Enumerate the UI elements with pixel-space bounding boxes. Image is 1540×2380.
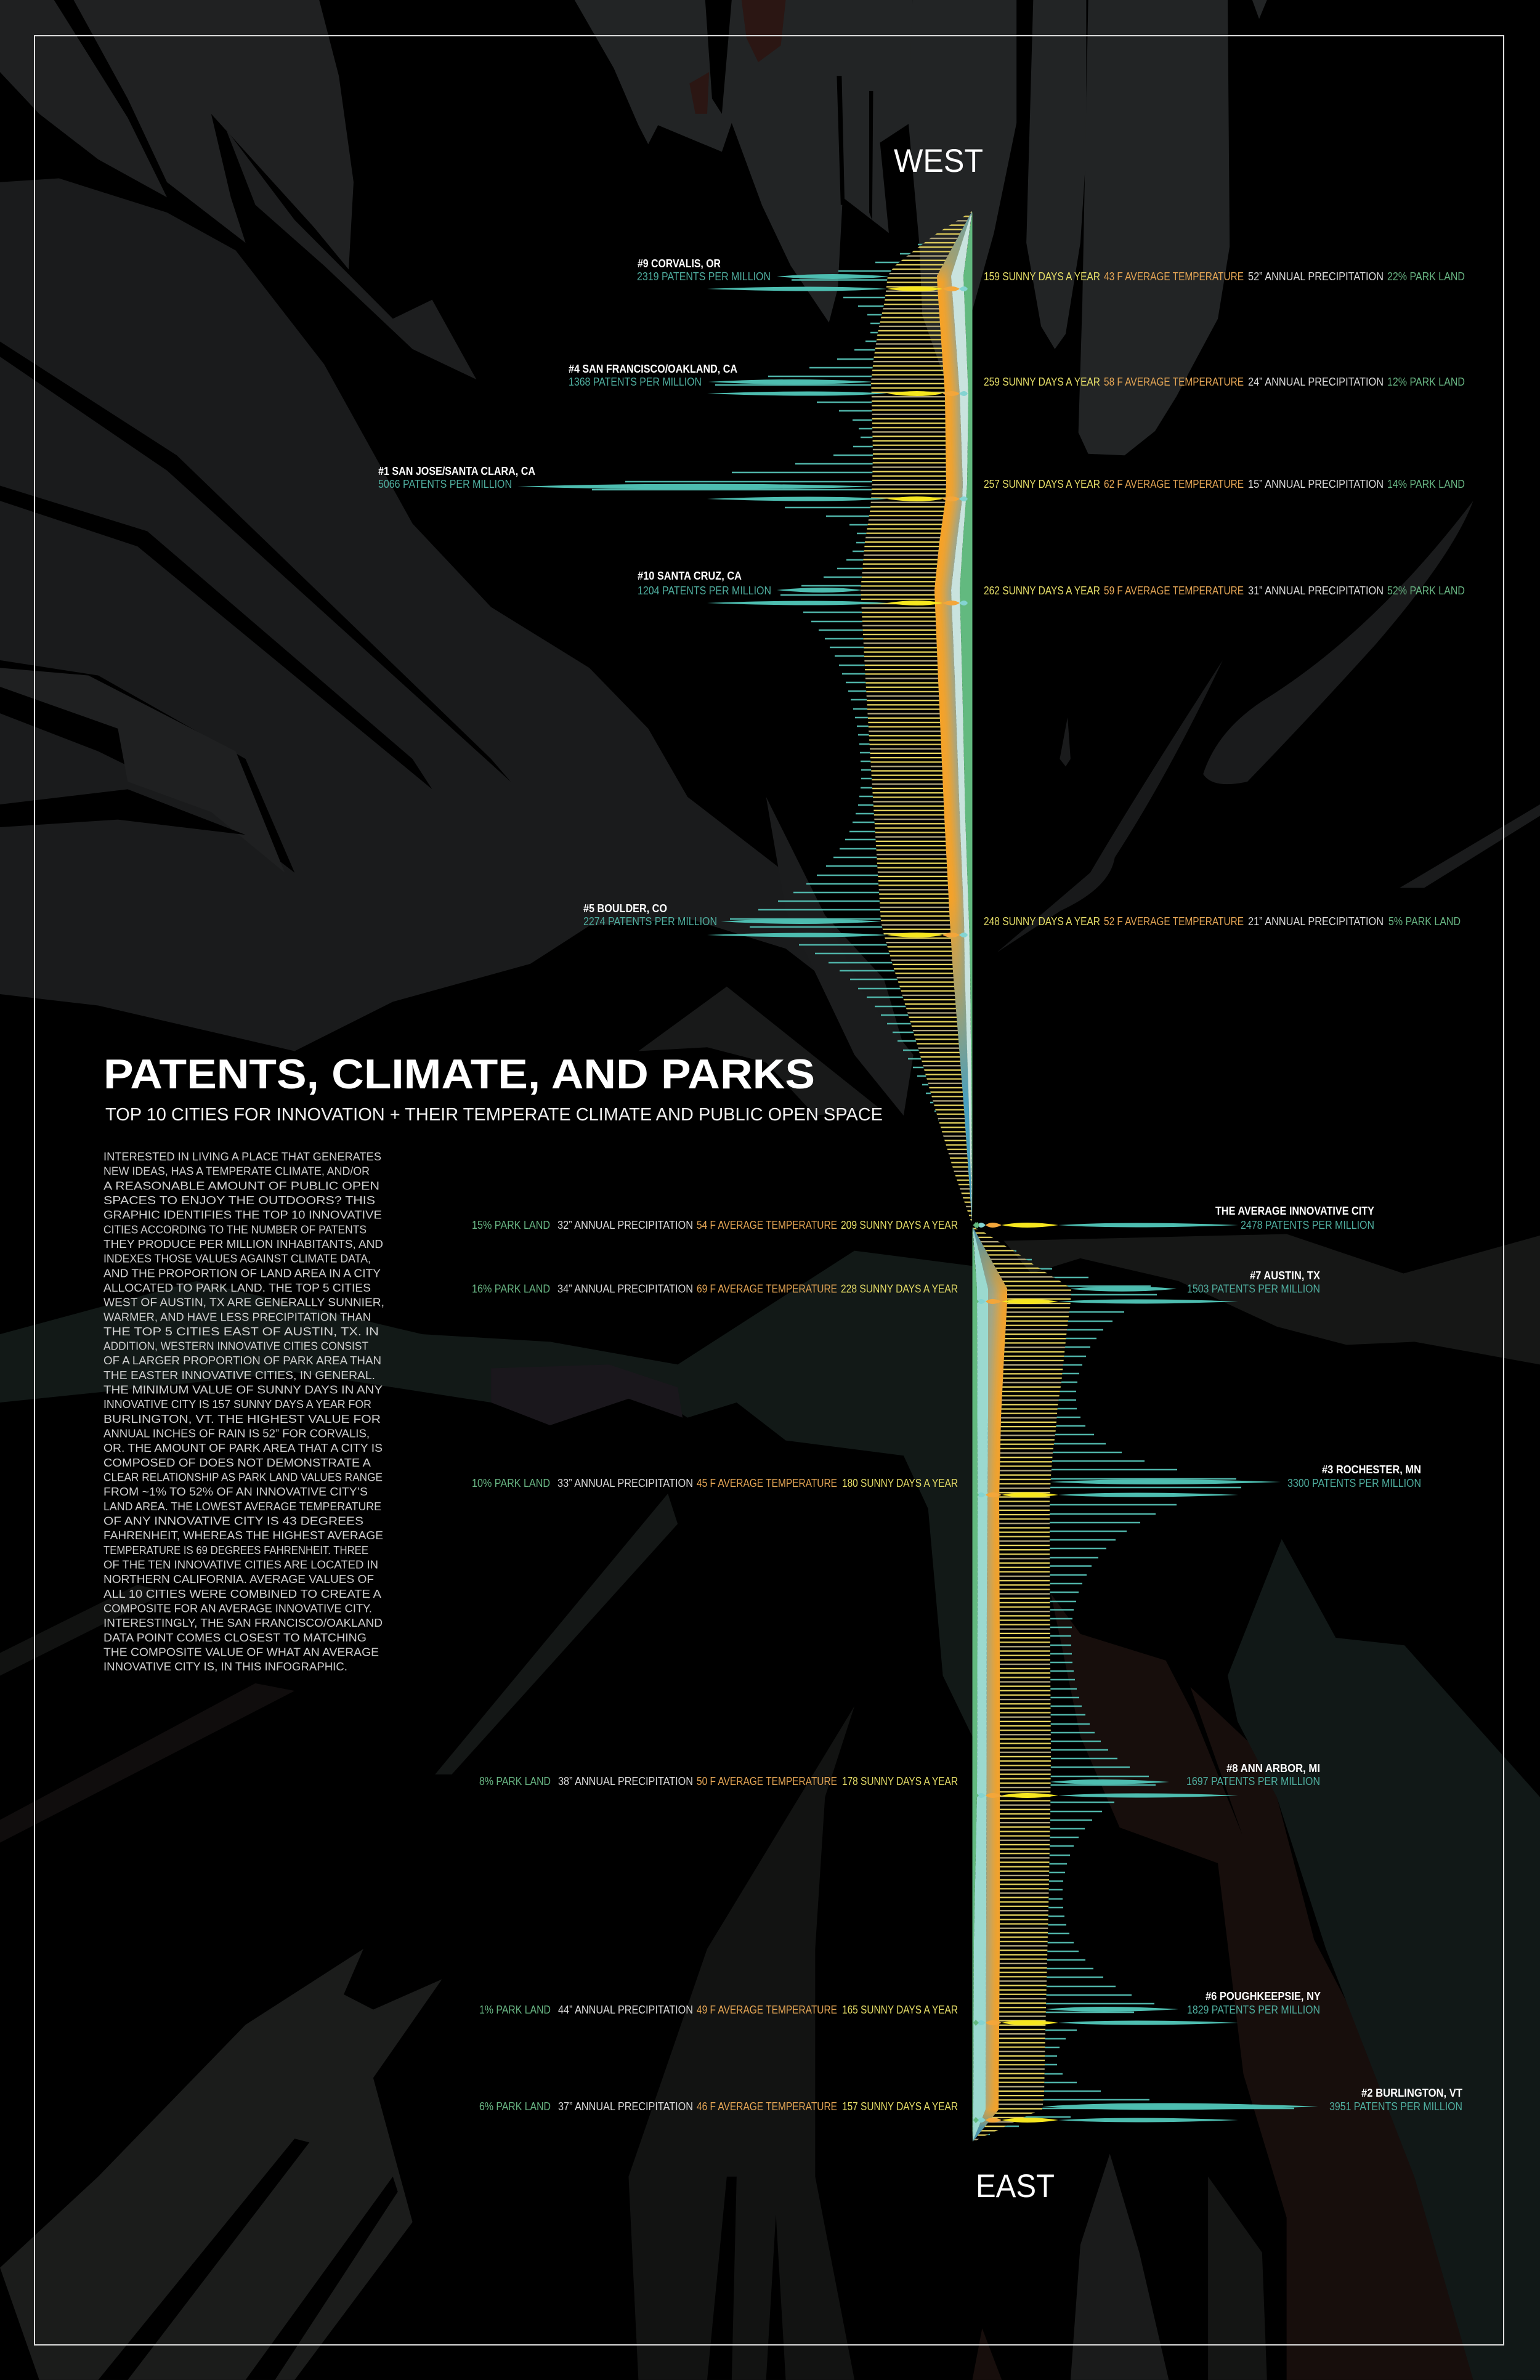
row: corvalis: 22% PARK LAND <box>1387 270 1465 283</box>
label: austin: 1503 PATENTS PER MILLION <box>1187 1282 1320 1295</box>
label: poughkeepsie: 1829 PATENTS PER MILLION <box>1187 2004 1320 2016</box>
text block: introduction: THE MINIMUM VALUE OF SUNNY DAYS IN ANY <box>103 1384 383 1396</box>
row: burlington <box>479 2100 958 2113</box>
row: san jose: 15” ANNUAL PRECIPITATION <box>1248 478 1384 490</box>
label: average city: THE AVERAGE INNOVATIVE CITY <box>1215 1205 1374 1217</box>
west blue tint <box>934 211 972 1223</box>
row: corvalis: 43 F AVERAGE TEMPERATURE <box>1104 270 1244 283</box>
row: boulder: 21” ANNUAL PRECIPITATION <box>1248 915 1384 928</box>
east blue tint <box>973 1227 1007 2142</box>
text block: introduction: FAHRENHEIT, WHEREAS THE HIGHEST AVERAGE <box>103 1529 383 1542</box>
row: rochester: 33” ANNUAL PRECIPITATION <box>557 1477 693 1489</box>
west city labels <box>378 257 771 928</box>
text block: introduction: GRAPHIC IDENTIFIES THE TOP 10 INNOVATIVE <box>103 1209 382 1221</box>
row: boulder <box>984 915 1461 928</box>
west park land band <box>960 211 972 1223</box>
row: boulder: 5% PARK LAND <box>1388 915 1461 928</box>
text block: introduction: COMPOSITE FOR AN AVERAGE INNOVATIVE CITY. <box>103 1603 372 1615</box>
row: santa cruz: 59 F AVERAGE TEMPERATURE <box>1104 585 1244 597</box>
row: burlington: 157 SUNNY DAYS A YEAR <box>842 2100 958 2113</box>
west patent lines <box>517 236 972 1120</box>
text block: introduction: INDEXES THOSE VALUES AGAINST CLIMATE DATA, <box>103 1253 371 1265</box>
label: average city <box>1215 1205 1374 1231</box>
east city labels <box>1186 1205 1462 2113</box>
text block: introduction: INNOVATIVE CITY IS 157 SUNNY DAYS A YEAR FOR <box>103 1398 371 1411</box>
row: san francisco: 58 F AVERAGE TEMPERATURE <box>1104 376 1244 388</box>
marker: austin <box>973 1298 1238 1305</box>
row: austin: 34” ANNUAL PRECIPITATION <box>557 1282 693 1295</box>
row: boulder: 52 F AVERAGE TEMPERATURE <box>1104 915 1244 928</box>
east data rows <box>472 1219 958 2113</box>
row: corvalis <box>984 270 1465 283</box>
east precipitation band <box>973 1227 988 2142</box>
row: santa cruz: 31” ANNUAL PRECIPITATION <box>1248 585 1384 597</box>
text block: introduction: NORTHERN CALIFORNIA. AVERAGE VALUES OF <box>103 1573 374 1585</box>
label: santa cruz <box>638 570 771 597</box>
text block: introduction: INTERESTINGLY, THE SAN FRANCISCO/OAKLAND <box>103 1617 383 1629</box>
title: PATENTS, CLIMATE, AND PARKS <box>103 1051 815 1098</box>
label: san francisco: #4 SAN FRANCISCO/OAKLAND, CA <box>569 363 737 375</box>
text block: introduction: ALLOCATED TO PARK LAND. THE TOP 5 CITIES <box>103 1282 371 1294</box>
label: corvalis: 2319 PATENTS PER MILLION <box>637 270 771 283</box>
label: boulder <box>583 902 717 928</box>
west sunny days comb <box>861 211 972 1223</box>
row: santa cruz: 262 SUNNY DAYS A YEAR <box>984 585 1100 597</box>
label: san francisco: 1368 PATENTS PER MILLION <box>569 376 702 388</box>
text block: introduction <box>103 1151 384 1673</box>
label: rochester: #3 ROCHESTER, MN <box>1322 1463 1421 1476</box>
marker: poughkeepsie <box>973 2020 1238 2026</box>
label: austin: #7 AUSTIN, TX <box>1250 1269 1320 1282</box>
text block: introduction: INNOVATIVE CITY IS, IN THIS INFOGRAPHIC. <box>103 1661 347 1673</box>
row: san francisco <box>984 376 1465 388</box>
marker: ann arbor <box>973 1792 1238 1799</box>
label: average city: 2478 PATENTS PER MILLION <box>1241 1219 1374 1231</box>
west precipitation band <box>951 211 972 1223</box>
text block: introduction: THE EASTER INNOVATIVE CITIES, IN GENERAL. <box>103 1369 375 1382</box>
marker: san jose <box>707 496 968 501</box>
row: ann arbor <box>479 1775 958 1787</box>
chart: east cities <box>972 1222 1318 2142</box>
row: san jose: 14% PARK LAND <box>1387 478 1465 490</box>
row: ann arbor: 38” ANNUAL PRECIPITATION <box>558 1775 693 1787</box>
marker: rochester <box>973 1492 1238 1498</box>
label: santa cruz: 1204 PATENTS PER MILLION <box>638 585 771 597</box>
label: ann arbor: 1697 PATENTS PER MILLION <box>1186 1775 1320 1787</box>
row: austin: 69 F AVERAGE TEMPERATURE <box>697 1282 837 1295</box>
text block: introduction: TEMPERATURE IS 69 DEGREES FAHRENHEIT. THREE <box>103 1544 368 1556</box>
text block: introduction: COMPOSED OF DOES NOT DEMONSTRATE A <box>103 1457 371 1469</box>
row: average city: 54 F AVERAGE TEMPERATURE <box>697 1219 837 1231</box>
text block: introduction: OR. THE AMOUNT OF PARK AREA THAT A CITY IS <box>103 1442 383 1454</box>
text block: introduction: A REASONABLE AMOUNT OF PUBLIC OPEN <box>103 1180 379 1192</box>
background splatter: upper half <box>0 0 1540 1115</box>
row: san jose: 257 SUNNY DAYS A YEAR <box>984 478 1100 490</box>
label: poughkeepsie <box>1187 1990 1321 2016</box>
row: san francisco: 259 SUNNY DAYS A YEAR <box>984 376 1100 388</box>
label: corvalis: #9 CORVALIS, OR <box>638 257 721 270</box>
east temperature orange edge <box>973 1227 1007 2142</box>
text block: introduction: CITIES ACCORDING TO THE NUMBER OF PATENTS <box>103 1223 367 1236</box>
text block: introduction: ADDITION, WESTERN INNOVATIVE CITIES CONSIST <box>103 1340 368 1353</box>
row: poughkeepsie: 165 SUNNY DAYS A YEAR <box>842 2004 958 2016</box>
text block: introduction: OF THE TEN INNOVATIVE CITIES ARE LOCATED IN <box>103 1558 378 1571</box>
label: corvalis <box>637 257 771 283</box>
row: austin: 228 SUNNY DAYS A YEAR <box>841 1282 958 1295</box>
text block: introduction: LAND AREA. THE LOWEST AVERAGE TEMPERATURE <box>103 1500 381 1513</box>
subtitle: TOP 10 CITIES FOR INNOVATION + THEIR TEMPERATE CLIMATE AND PUBLIC OPEN SPACE <box>105 1105 883 1125</box>
label: austin <box>1187 1269 1320 1295</box>
text block: introduction: INTERESTED IN LIVING A PLACE THAT GENERATES <box>103 1151 381 1163</box>
row: burlington: 6% PARK LAND <box>479 2100 551 2113</box>
row: austin: 16% PARK LAND <box>472 1282 550 1295</box>
east park land band <box>972 1227 978 2142</box>
row: boulder: 248 SUNNY DAYS A YEAR <box>984 915 1100 928</box>
heading: east: EAST <box>976 2168 1055 2204</box>
label: boulder: #5 BOULDER, CO <box>583 902 667 915</box>
label: poughkeepsie: #6 POUGHKEEPSIE, NY <box>1206 1990 1321 2002</box>
row: average city: 15% PARK LAND <box>472 1219 550 1231</box>
label: san jose <box>378 465 535 490</box>
row: rochester: 180 SUNNY DAYS A YEAR <box>842 1477 958 1489</box>
row: santa cruz <box>984 585 1465 597</box>
row: ann arbor: 8% PARK LAND <box>479 1775 551 1787</box>
east sunny days comb <box>973 1227 1071 2142</box>
row: poughkeepsie: 49 F AVERAGE TEMPERATURE <box>697 2004 837 2016</box>
east temperature band <box>973 1227 1007 2142</box>
row: poughkeepsie: 44” ANNUAL PRECIPITATION <box>558 2004 693 2016</box>
row: average city: 209 SUNNY DAYS A YEAR <box>841 1219 958 1231</box>
marker: santa cruz <box>707 601 968 605</box>
row: san jose <box>984 478 1465 490</box>
text block: introduction: NEW IDEAS, HAS A TEMPERATE CLIMATE, AND/OR <box>103 1165 370 1178</box>
row: rochester: 10% PARK LAND <box>472 1477 550 1489</box>
chart: west cities <box>517 211 972 1223</box>
row: ann arbor: 50 F AVERAGE TEMPERATURE <box>697 1775 837 1787</box>
marker: boulder <box>707 933 968 937</box>
label: santa cruz: #10 SANTA CRUZ, CA <box>638 570 742 582</box>
text block: introduction: CLEAR RELATIONSHIP AS PARK LAND VALUES RANGE <box>103 1471 383 1483</box>
row: burlington: 37” ANNUAL PRECIPITATION <box>558 2100 693 2113</box>
row: poughkeepsie: 1% PARK LAND <box>479 2004 551 2016</box>
text block: introduction: ALL 10 CITIES WERE COMBINED TO CREATE A <box>103 1588 381 1600</box>
row: austin <box>472 1282 958 1295</box>
text block: introduction: THE COMPOSITE VALUE OF WHAT AN AVERAGE <box>103 1646 379 1658</box>
row: poughkeepsie <box>479 2004 958 2016</box>
heading: west: WEST <box>894 143 983 179</box>
text block: introduction: AND THE PROPORTION OF LAND AREA IN A CITY <box>103 1267 381 1279</box>
row: san jose: 62 F AVERAGE TEMPERATURE <box>1104 478 1244 490</box>
text block: introduction: FROM ~1% TO 52% OF AN INNOVATIVE CITY’S <box>103 1486 368 1498</box>
background splatter: lower half <box>0 1234 1540 2380</box>
row: san francisco: 12% PARK LAND <box>1387 376 1465 388</box>
row: average city: 32” ANNUAL PRECIPITATION <box>557 1219 693 1231</box>
marker: average city <box>973 1222 1238 1228</box>
row: santa cruz: 52% PARK LAND <box>1387 585 1465 597</box>
row: rochester: 45 F AVERAGE TEMPERATURE <box>697 1477 837 1489</box>
text block: introduction: OF ANY INNOVATIVE CITY IS 43 DEGREES <box>103 1515 363 1528</box>
label: ann arbor: #8 ANN ARBOR, MI <box>1226 1762 1320 1775</box>
row: corvalis: 52” ANNUAL PRECIPITATION <box>1248 270 1384 283</box>
label: boulder: 2274 PATENTS PER MILLION <box>583 915 717 928</box>
row: corvalis: 159 SUNNY DAYS A YEAR <box>984 270 1100 283</box>
text block: introduction: WARMER, AND HAVE LESS PRECIPITATION THAN <box>103 1311 371 1323</box>
text block: introduction: DATA POINT COMES CLOSEST TO MATCHING <box>103 1632 367 1644</box>
text block: introduction: SPACES TO ENJOY THE OUTDOORS? THIS <box>103 1194 375 1207</box>
marker: san francisco <box>707 391 968 396</box>
row: burlington: 46 F AVERAGE TEMPERATURE <box>697 2100 837 2113</box>
row: rochester <box>472 1477 958 1489</box>
west temperature orange edge <box>934 211 972 1223</box>
label: san jose: 5066 PATENTS PER MILLION <box>378 478 512 490</box>
label: burlington: #2 BURLINGTON, VT <box>1361 2087 1462 2099</box>
west data rows <box>984 270 1465 928</box>
text block: introduction: BURLINGTON, VT. THE HIGHEST VALUE FOR <box>103 1413 381 1425</box>
row: average city <box>472 1219 958 1231</box>
text block: introduction: THEY PRODUCE PER MILLION INHABITANTS, AND <box>103 1238 383 1250</box>
label: rochester: 3300 PATENTS PER MILLION <box>1287 1477 1421 1489</box>
row: ann arbor: 178 SUNNY DAYS A YEAR <box>842 1775 958 1787</box>
label: rochester <box>1287 1463 1421 1489</box>
text block: introduction: THE TOP 5 CITIES EAST OF AUSTIN, TX. IN <box>103 1326 379 1338</box>
label: burlington <box>1329 2087 1462 2113</box>
text block: introduction: WEST OF AUSTIN, TX ARE GENERALLY SUNNIER, <box>103 1297 384 1309</box>
west temperature band <box>934 211 972 1223</box>
label: ann arbor <box>1186 1762 1320 1787</box>
marker: burlington <box>973 2117 1238 2123</box>
text block: introduction: OF A LARGER PROPORTION OF PARK AREA THAN <box>103 1354 381 1367</box>
marker: corvalis <box>707 286 968 291</box>
east patent lines <box>973 1251 1318 2134</box>
row: san francisco: 24” ANNUAL PRECIPITATION <box>1248 376 1384 388</box>
label: burlington: 3951 PATENTS PER MILLION <box>1329 2100 1462 2113</box>
text block: introduction: ANNUAL INCHES OF RAIN IS 52” FOR CORVALIS, <box>103 1428 370 1440</box>
label: san jose: #1 SAN JOSE/SANTA CLARA, CA <box>378 465 535 477</box>
label: san francisco <box>569 363 737 388</box>
